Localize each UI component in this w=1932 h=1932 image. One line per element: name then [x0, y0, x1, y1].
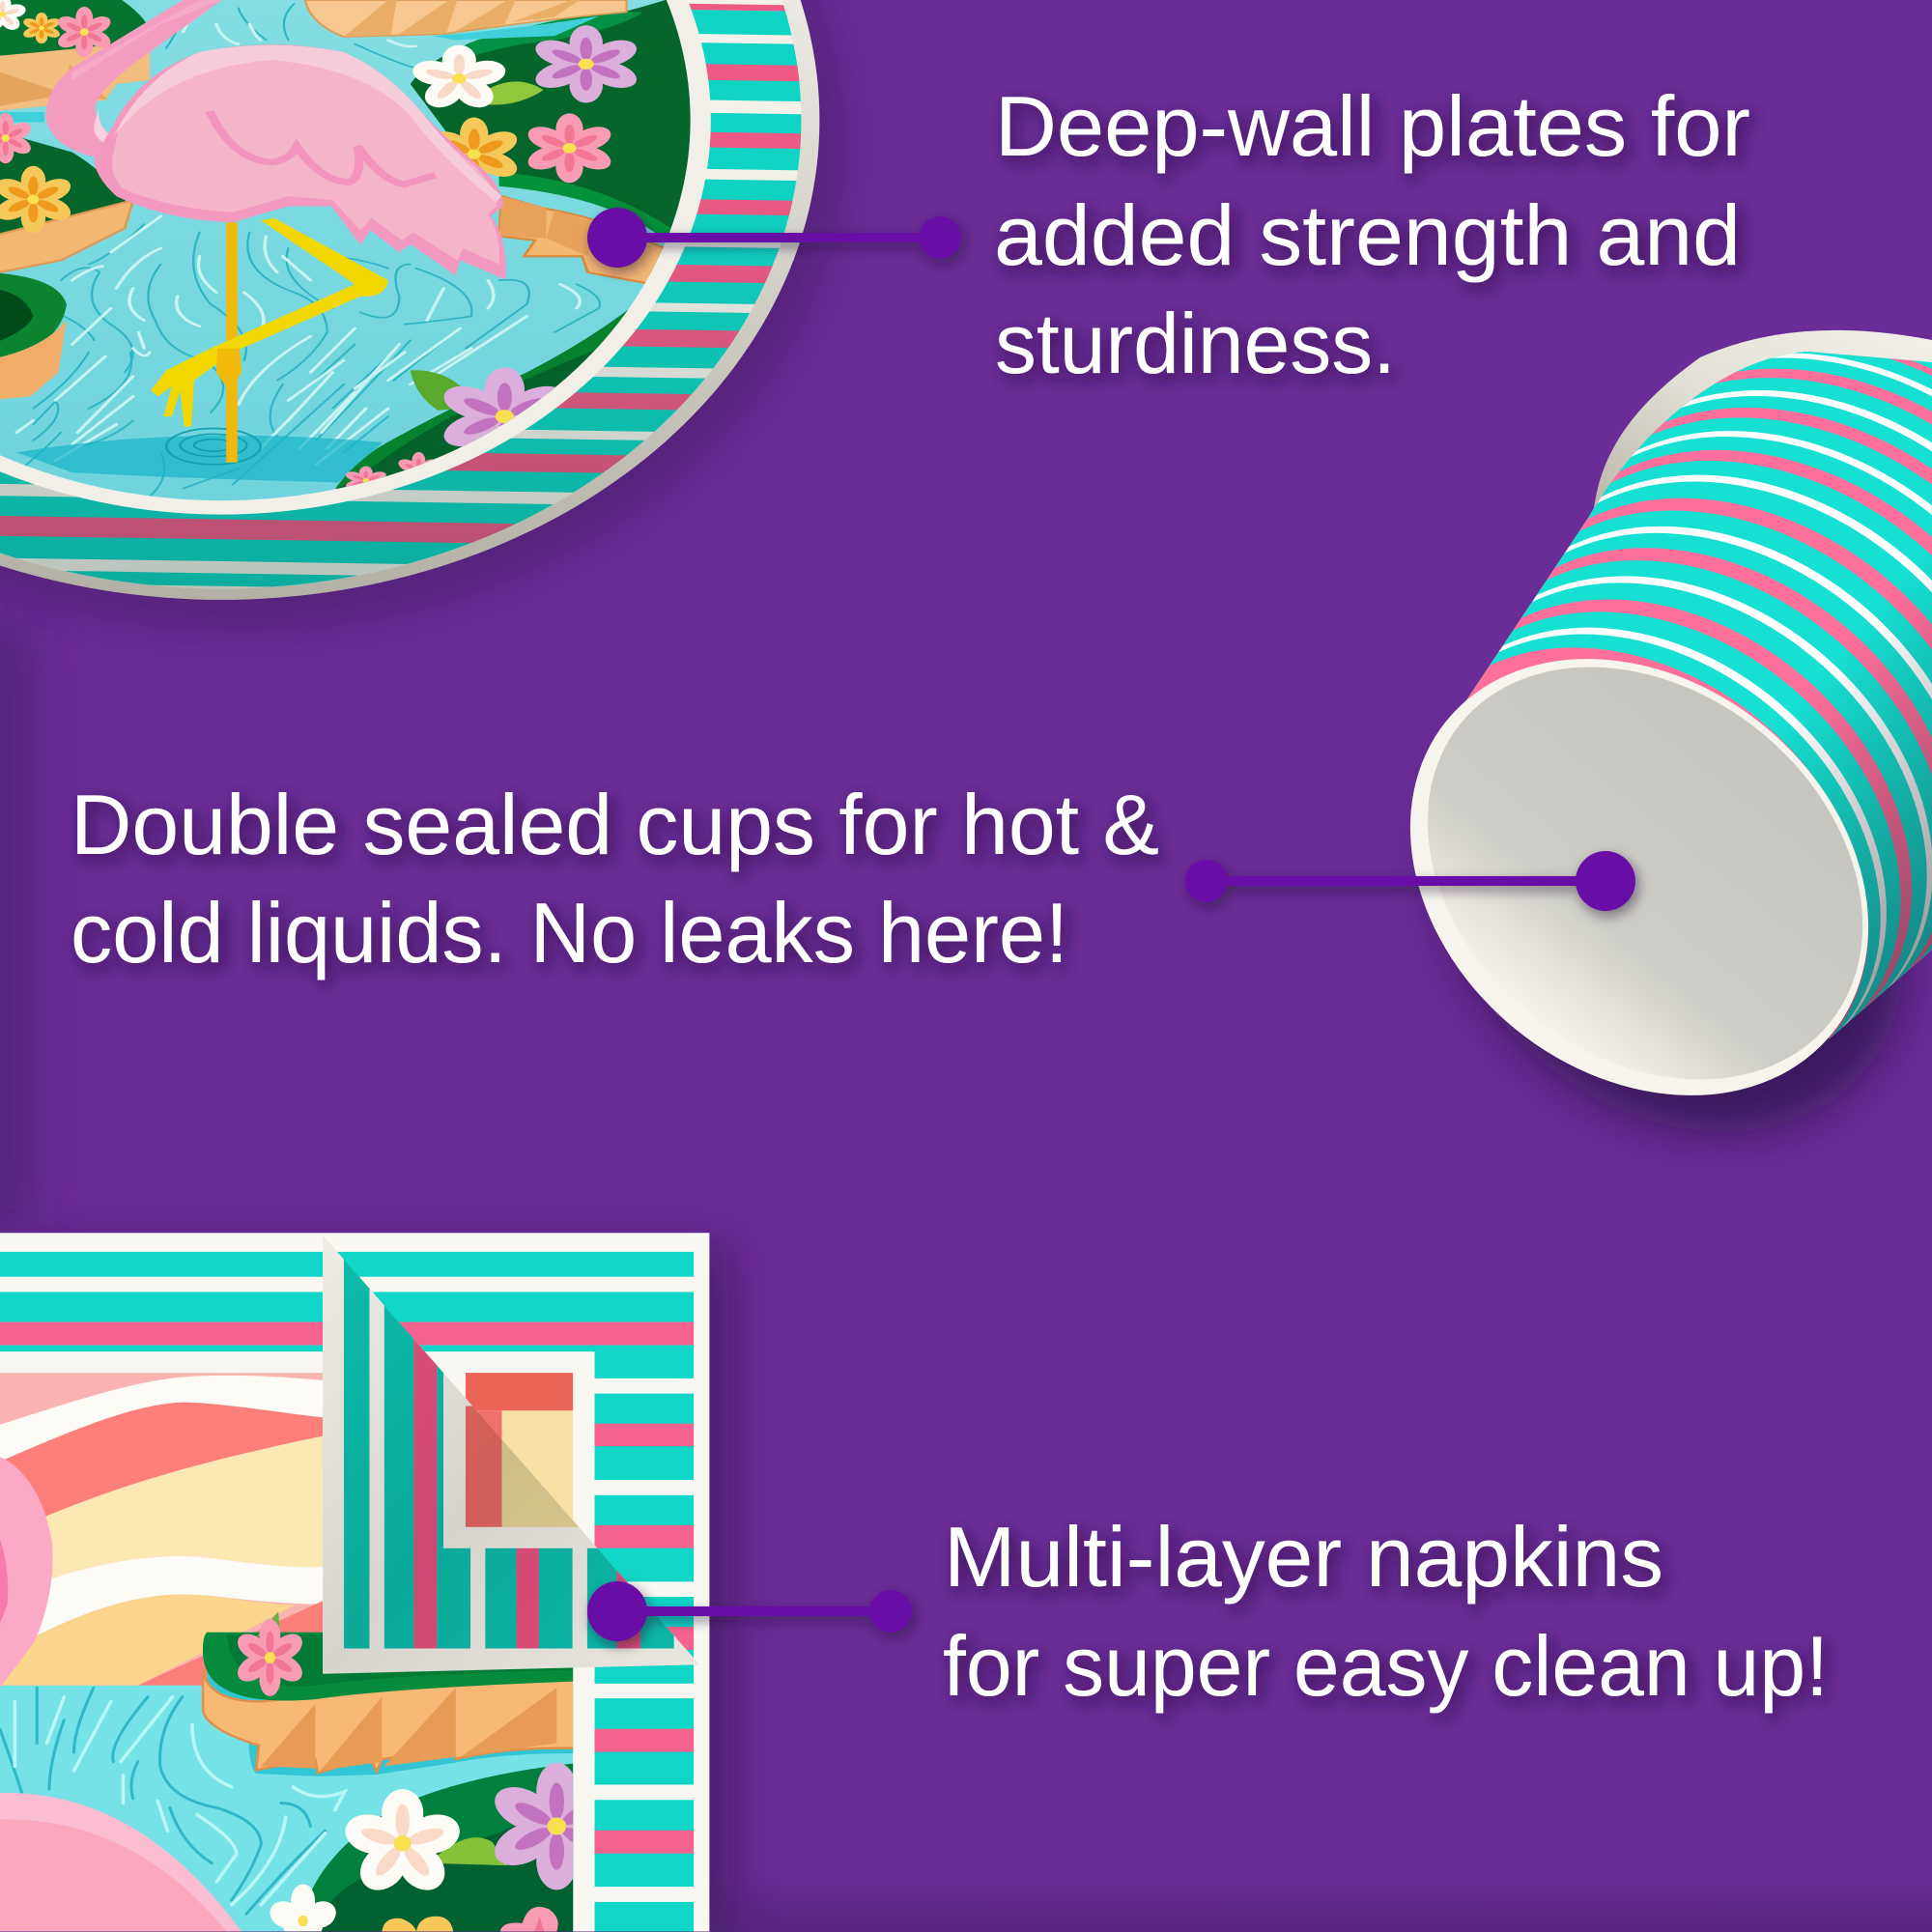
- napkin top and side stripes: [0, 1252, 694, 1932]
- plate illustration: [0, 0, 721, 521]
- napkin island: [207, 1669, 591, 1776]
- upper left island: [0, 0, 146, 56]
- callout: plate connector: [587, 208, 961, 268]
- panel: paper plate: [0, 0, 895, 625]
- text: cup feature: [71, 777, 1159, 980]
- text: cup feature: Double sealed cups for hot &: [71, 777, 1159, 872]
- plate striped border: [0, 0, 802, 589]
- text: napkin feature: for super easy clean up!: [943, 1618, 1829, 1714]
- plate inner white ring: [0, 0, 711, 515]
- napkin illustration: [0, 1373, 627, 1932]
- water ripple lines: [16, 4, 600, 497]
- middle left island: [0, 138, 126, 234]
- lower left island: [0, 271, 67, 364]
- panel: paper cup: [1410, 330, 1932, 1153]
- text: plate feature: [994, 78, 1750, 391]
- callout: napkin connector: [587, 1581, 912, 1641]
- text: napkin feature: Multi-layer napkins: [944, 1509, 1663, 1605]
- flamingo wing: [95, 44, 506, 279]
- cup rim: [1589, 330, 1932, 517]
- lower right island: [335, 309, 628, 489]
- callout: cup connector: [1185, 851, 1635, 911]
- cup base disc: [1323, 569, 1932, 1185]
- napkin water lines: [0, 1688, 345, 1914]
- text: cup feature: cold liquids. No leaks here!: [71, 885, 1068, 980]
- right rocks: [499, 196, 666, 286]
- flamingo neck: [45, 0, 222, 158]
- text: plate feature: sturdiness.: [995, 296, 1396, 391]
- darker pool with ripples: [16, 436, 383, 482]
- upper right island: [410, 0, 691, 233]
- napkin center white box: [443, 1352, 694, 1666]
- text: napkin feature: [943, 1509, 1829, 1714]
- upper rocks: [305, 0, 627, 37]
- napkin folded corner: [323, 1236, 699, 1674]
- flamingo legs: [151, 218, 388, 463]
- cup striped body: [1466, 352, 1932, 1038]
- plate flowers: [0, 0, 643, 495]
- panel: napkin: [0, 1233, 729, 1932]
- napkin flowers: [234, 1611, 627, 1932]
- text: plate feature: Deep-wall plates for: [995, 78, 1750, 174]
- napkin flamingo: [0, 1457, 242, 1932]
- plate rim: [0, 0, 819, 600]
- napkin lower island: [300, 1762, 591, 1932]
- flamingo: [45, 0, 506, 463]
- text: plate feature: added strength and: [994, 187, 1741, 283]
